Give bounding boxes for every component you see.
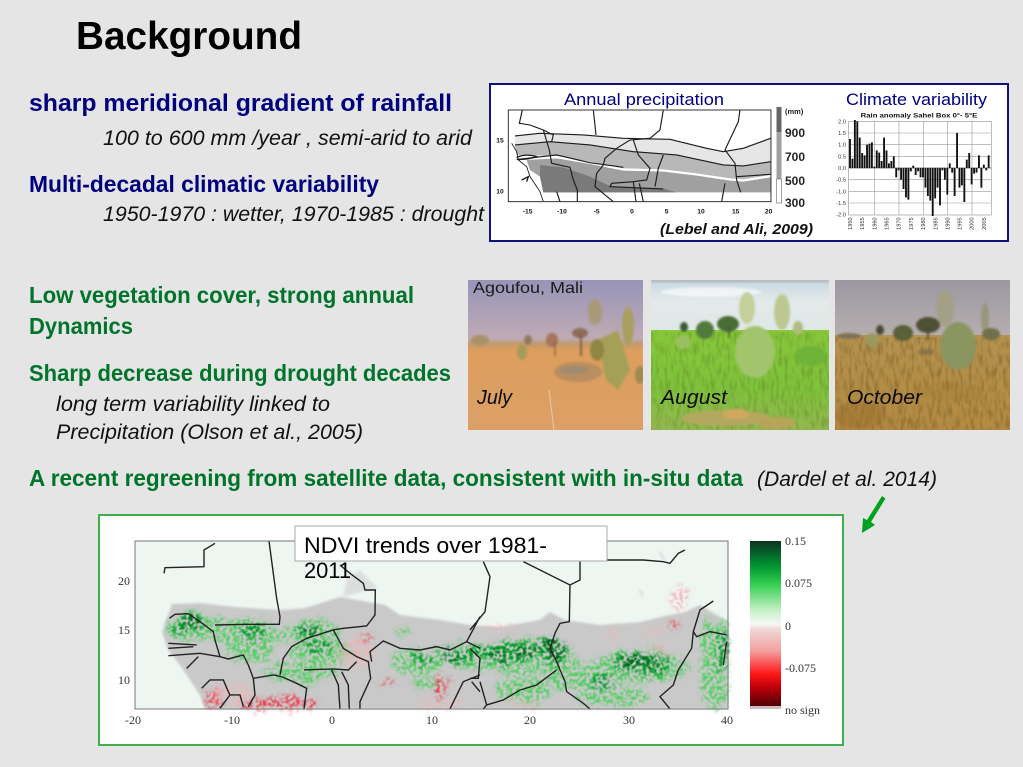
colour scale: NDVI: 0	[785, 619, 791, 633]
bar chart: rain anomaly: 1980	[921, 217, 927, 230]
citation: (Lebel and Ali, 2009)	[660, 221, 813, 238]
bar chart: rain anomaly: 1.5	[838, 131, 846, 137]
photo: August	[651, 280, 829, 430]
precipitation map: 15	[496, 137, 504, 144]
text block: climatic variability: 1950-1970 : wetter, 1970-1985 : drought	[103, 203, 485, 226]
heading: annual precipitation: Annual precipitation	[564, 90, 724, 109]
bar chart: rain anomaly: 1995	[958, 217, 964, 230]
bar chart: rain anomaly: 1970	[897, 217, 903, 230]
heading: climate variability: Climate variability	[846, 90, 988, 109]
map axis labels: 0	[329, 713, 335, 727]
text block: rainfall gradient: 100 to 600 mm /year , semi-arid to arid	[103, 127, 473, 150]
map axis labels: 20	[524, 713, 536, 727]
bar chart: rain anomaly	[836, 112, 991, 230]
text block: drought decrease: long term variability linked to	[56, 393, 330, 416]
bar chart: rain anomaly: -1.5	[836, 201, 846, 207]
photo captions: Agoufou, Mali	[473, 280, 583, 297]
colour scale: NDVI: -0.075	[785, 661, 816, 675]
text block: regreening: (Dardel et al. 2014)	[757, 468, 937, 491]
text block: rainfall gradient	[29, 90, 473, 150]
colour scale: precipitation	[776, 107, 805, 210]
text block: climatic variability	[29, 171, 485, 226]
bar chart: rain anomaly: -2.0	[836, 213, 846, 219]
bar chart: rain anomaly: 2.0	[838, 119, 846, 125]
map axis labels: -20	[125, 713, 141, 727]
map axis labels: 20	[118, 574, 130, 588]
precipitation map: -5	[594, 209, 600, 216]
bar chart: rain anomaly: 2000	[970, 217, 976, 230]
bar chart: rain anomaly: 1955	[860, 217, 866, 230]
photo captions: July	[476, 387, 513, 409]
arrow	[862, 496, 886, 533]
map axis labels: 15	[118, 623, 130, 637]
text block: regreening: A recent regreening from satellite data, consistent with in-situ data	[29, 465, 744, 491]
map axis labels: 40	[721, 713, 733, 727]
map axis labels: -10	[224, 713, 240, 727]
colour scale: NDVI: no sign	[785, 703, 820, 717]
photo captions	[473, 280, 923, 409]
bar chart: rain anomaly: -0.5	[836, 178, 846, 184]
bar chart: rain anomaly: 1950	[848, 217, 854, 230]
bar chart: rain anomaly: 1965	[885, 217, 891, 230]
map axis labels	[118, 574, 733, 727]
title: Background	[76, 15, 302, 58]
photo captions: August	[660, 387, 729, 409]
bar chart: rain anomaly: -1.0	[836, 189, 846, 195]
map axis labels: 10	[426, 713, 438, 727]
text block: vegetation cover: Low vegetation cover, strong annual	[29, 282, 414, 308]
precipitation map: 0	[630, 209, 634, 216]
colour scale: precipitation: 300	[785, 196, 805, 210]
text block: drought decrease	[29, 360, 451, 444]
text block: vegetation cover	[29, 282, 414, 339]
precipitation map: 10	[697, 209, 705, 216]
panel: NDVI trends map	[99, 515, 843, 745]
colour scale: precipitation: 900	[785, 126, 805, 140]
precipitation map	[496, 110, 773, 216]
map axis labels: 30	[623, 713, 635, 727]
precipitation map: 5	[665, 209, 669, 216]
text block: drought decrease: Precipitation (Olson et al., 2005)	[56, 421, 363, 444]
bar chart: rain anomaly: 2005	[982, 217, 988, 230]
photo captions: October	[847, 387, 923, 409]
precipitation map: 15	[732, 209, 740, 216]
callout: NDVI trends: NDVI trends over 1981-	[304, 533, 547, 558]
bar chart: rain anomaly: Rain anomaly Sahel Box 0°- 5°E	[861, 112, 978, 120]
map axis labels: 10	[118, 673, 130, 687]
text block: rainfall gradient: sharp meridional gradient of rainfall	[29, 90, 452, 117]
bar chart: rain anomaly: 1985	[933, 217, 939, 230]
bar chart: rain anomaly: 0.0	[838, 166, 846, 172]
NDVI map	[135, 541, 728, 710]
bar chart: rain anomaly: 1960	[872, 217, 878, 230]
country borders	[164, 541, 727, 709]
colour scale: precipitation: 700	[785, 150, 805, 164]
bar chart: rain anomaly: 1.0	[838, 143, 846, 149]
precipitation map: 10	[496, 188, 504, 195]
colour scale: NDVI: 0.15	[785, 534, 806, 548]
bar chart: rain anomaly: 1975	[909, 217, 915, 230]
colour scale: precipitation: (mm)	[785, 107, 804, 116]
callout: NDVI trends: 2011	[304, 558, 351, 583]
colour scale: precipitation: 500	[785, 174, 805, 188]
text block: vegetation cover: Dynamics	[29, 313, 133, 339]
colour scale: NDVI: 0.075	[785, 576, 812, 590]
precipitation map: -15	[523, 209, 533, 216]
text block: drought decrease: Sharp decrease during drought decades	[29, 360, 451, 386]
callout: NDVI trends	[295, 526, 607, 583]
bar chart: rain anomaly: 1990	[945, 217, 951, 230]
bar chart: rain anomaly: 0.5	[838, 154, 846, 160]
colour scale: NDVI	[750, 534, 820, 717]
photo: October	[835, 280, 1010, 430]
panel: precipitation and climate variability	[490, 84, 1008, 241]
precipitation map: 20	[765, 209, 773, 216]
text block: climatic variability: Multi-decadal climatic variability	[29, 171, 379, 197]
photo: July	[468, 280, 643, 430]
precipitation map: -10	[557, 209, 567, 216]
